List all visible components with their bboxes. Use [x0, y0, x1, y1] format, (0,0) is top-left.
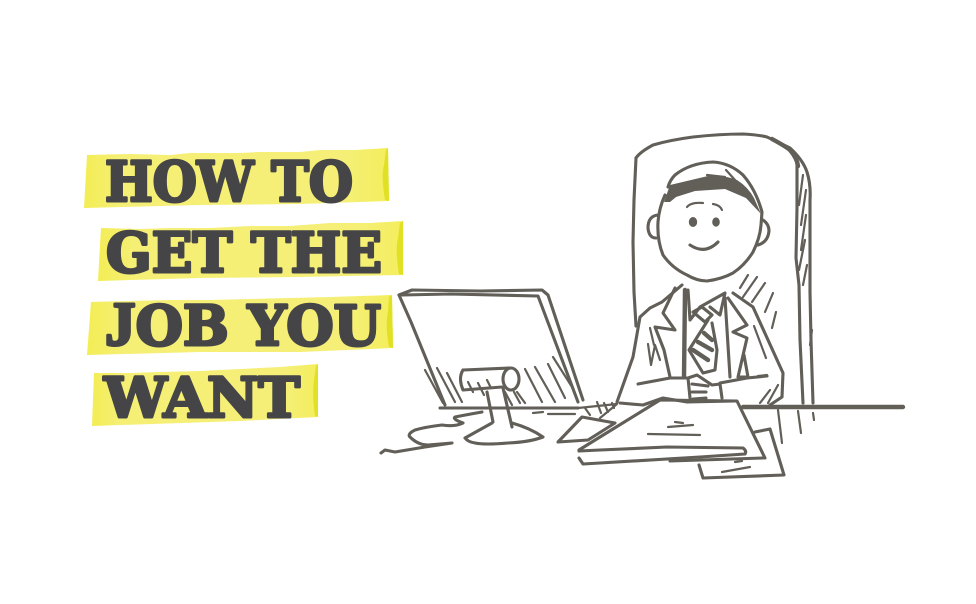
cable — [381, 412, 482, 453]
hair — [664, 176, 761, 214]
heading line: HOW TO: HOW TO — [105, 149, 353, 214]
hands — [688, 375, 722, 399]
folder — [579, 400, 765, 464]
monitor stand — [460, 368, 543, 444]
ears — [648, 215, 658, 238]
desk — [743, 407, 903, 443]
chair shading — [740, 275, 776, 328]
heading line: GET THE: GET THE — [106, 220, 382, 285]
keyboard — [533, 402, 617, 442]
title: how to get the job you want — [84, 148, 403, 430]
tie — [689, 307, 717, 373]
highlight band: line 3 — [87, 295, 393, 355]
heading line: JOB YOU: JOB YOU — [105, 291, 381, 359]
highlight band: line 4 — [92, 364, 318, 426]
paper — [699, 429, 784, 478]
highlight band: line 1 — [84, 148, 389, 208]
eyes — [689, 217, 697, 227]
monitor — [399, 290, 583, 408]
highlight band: line 2 — [98, 221, 403, 281]
eyebrows — [687, 203, 722, 210]
suit — [617, 285, 783, 405]
illustration: man at desk — [381, 134, 903, 478]
heading line: WANT: WANT — [103, 365, 300, 430]
chair — [633, 134, 813, 403]
head — [648, 162, 769, 281]
smile — [690, 242, 718, 249]
